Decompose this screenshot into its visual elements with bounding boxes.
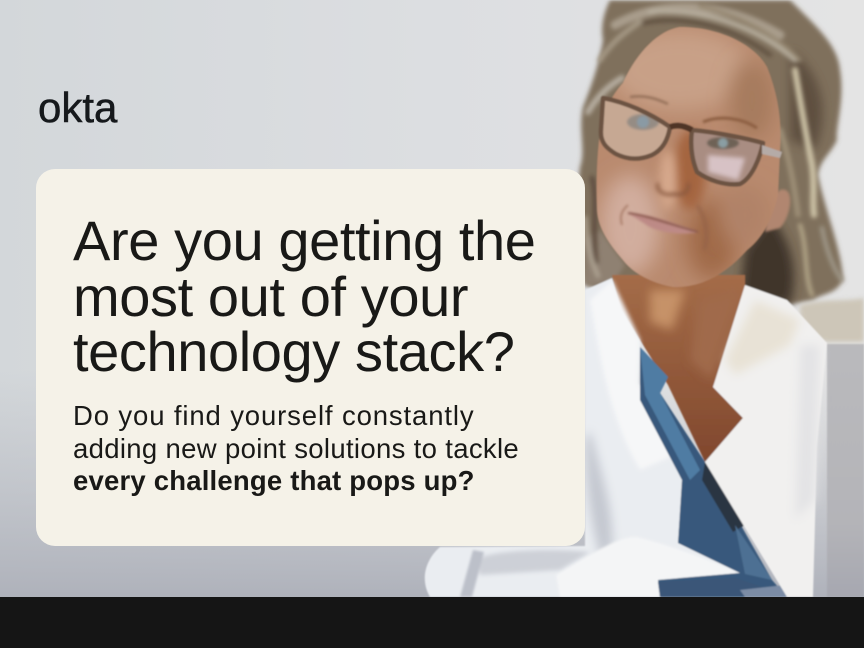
mouth	[628, 213, 698, 234]
shirt: blue	[640, 347, 787, 597]
laptop at right	[827, 344, 864, 597]
brows	[630, 96, 668, 104]
hair	[578, 0, 843, 310]
heading	[73, 209, 536, 383]
panel: message card	[36, 169, 585, 546]
heading: technology stack?	[73, 320, 514, 383]
heading: most out of your	[73, 264, 468, 328]
coat, right side	[705, 285, 827, 597]
coat, left side	[425, 278, 740, 597]
eyes and glasses	[601, 98, 782, 184]
ear	[765, 189, 790, 232]
beige shoulder	[800, 298, 864, 342]
heading: Are you getting the	[73, 209, 536, 272]
footer bar	[0, 597, 864, 648]
body text: adding new point solutions to tackle	[73, 432, 519, 464]
body text: every challenge that pops up?	[73, 465, 475, 496]
face	[596, 26, 781, 288]
body text: Do you find yourself constantly	[73, 400, 474, 431]
body text	[73, 400, 519, 496]
logo: okta	[38, 84, 117, 131]
nose	[657, 183, 688, 195]
neck	[612, 275, 745, 462]
